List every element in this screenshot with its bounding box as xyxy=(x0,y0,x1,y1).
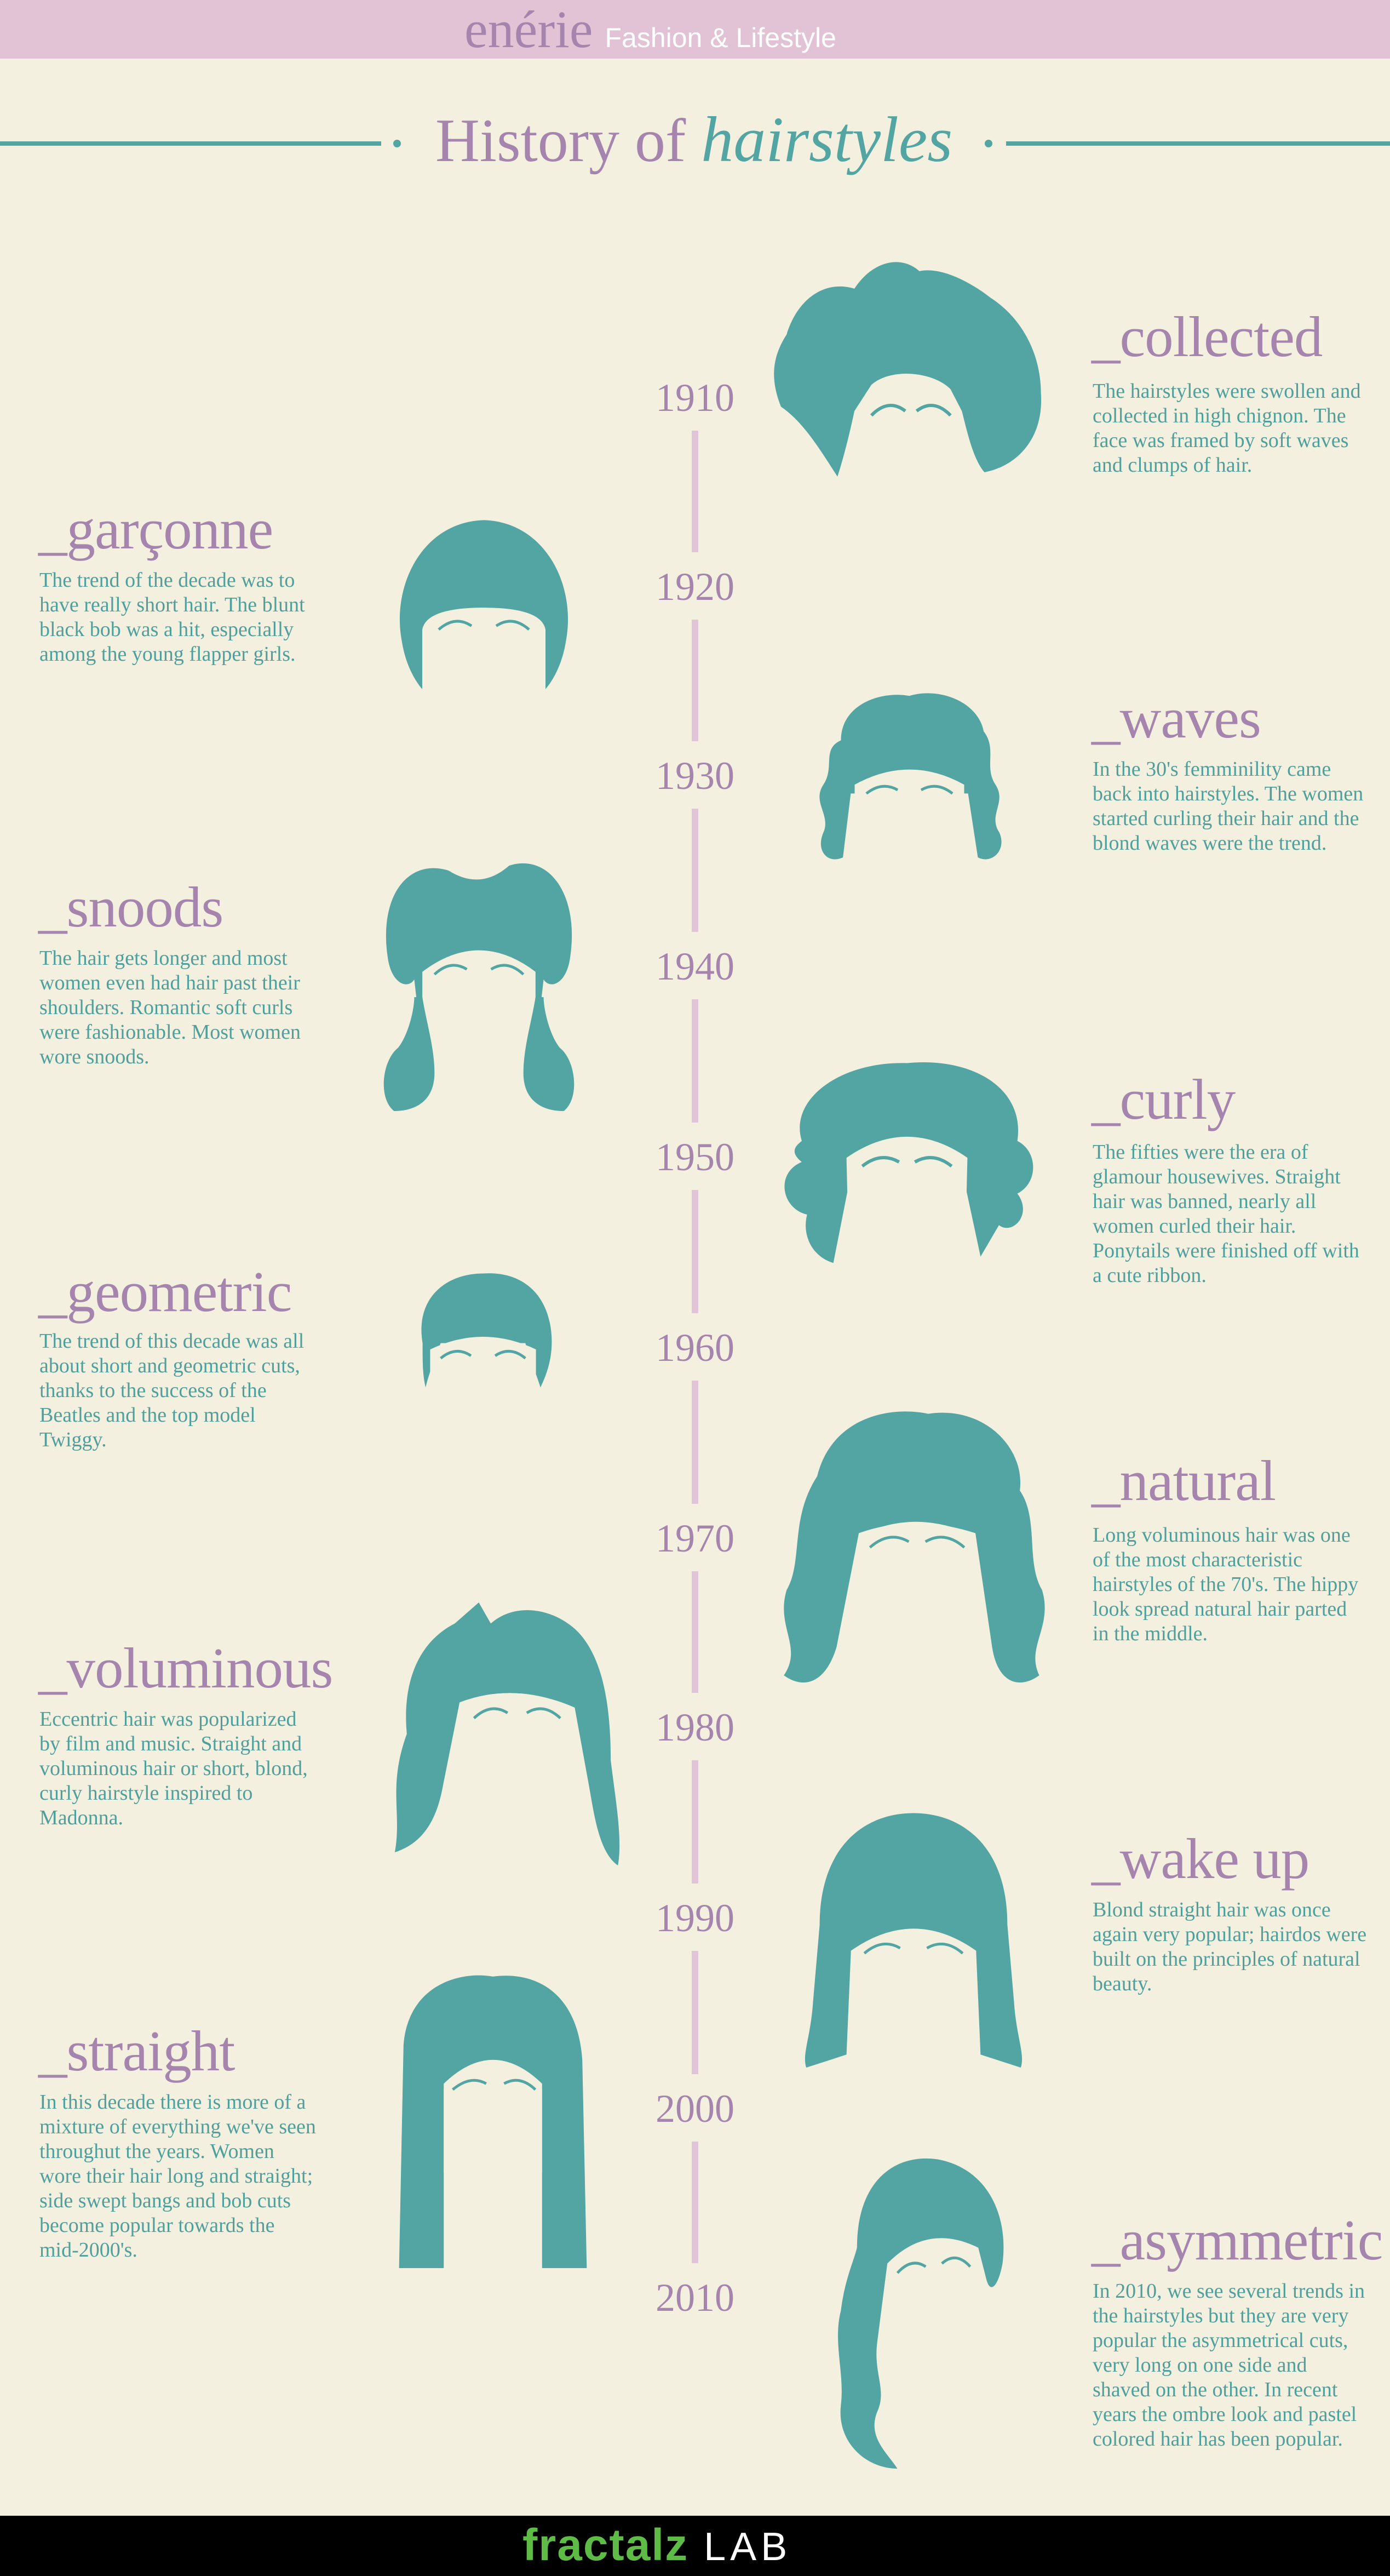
text: asymmetric: very long on one side and xyxy=(1093,2354,1307,2377)
text: wake up: built on the principles of natural xyxy=(1093,1948,1360,1971)
text: asymmetric: popular the asymmetrical cuts, xyxy=(1093,2329,1348,2352)
icon: 1930 waves hair xyxy=(819,693,1002,859)
text: voluminous: voluminous hair or short, blond, xyxy=(39,1757,308,1780)
text: curly: The fifties were the era of xyxy=(1093,1141,1308,1164)
text: garconne: The trend of the decade was to xyxy=(39,569,295,592)
icon: 1910 collected hair xyxy=(774,262,1042,477)
text: garconne: among the young flapper girls. xyxy=(39,643,296,666)
text: geometric: The trend of this decade was all xyxy=(39,1330,304,1353)
text: collected: face was framed by soft waves xyxy=(1093,429,1348,452)
title divider xyxy=(0,140,1390,147)
text: straight: throughut the years. Women xyxy=(39,2140,274,2163)
brand logo: enérie Fashion & Lifestyle xyxy=(464,0,836,59)
text: curly: a cute ribbon. xyxy=(1093,1264,1207,1287)
timeline xyxy=(656,376,734,2320)
text: wake up xyxy=(1093,1898,1366,1995)
heading: curly: _curly xyxy=(1092,1067,1235,1131)
text: asymmetric: In 2010, we see several trends in xyxy=(1093,2280,1365,2303)
text: straight: become popular towards the xyxy=(39,2214,274,2237)
text: natural xyxy=(1093,1524,1358,1645)
icon: 1960 geometric hair xyxy=(421,1273,552,1387)
text: collected: The hairstyles were swollen and xyxy=(1093,380,1361,403)
footer logo: fractalz LAB xyxy=(522,2520,791,2570)
icon: 1920 garconne hair xyxy=(400,520,568,689)
text: waves: started curling their hair and the xyxy=(1093,807,1359,830)
timeline: 2000 xyxy=(656,2087,734,2131)
text: garconne: have really short hair. The blunt xyxy=(39,593,305,616)
heading: garconne: _garçonne xyxy=(38,497,273,561)
text: straight: side swept bangs and bob cuts xyxy=(39,2189,291,2212)
text: collected xyxy=(1093,380,1361,477)
text: snoods: were fashionable. Most women xyxy=(39,1021,301,1044)
title: History of hairstyles xyxy=(435,104,952,175)
heading: geometric: _geometric xyxy=(38,1260,291,1324)
heading: wake up: _wake up xyxy=(1092,1827,1309,1891)
text: straight: mid-2000's. xyxy=(39,2239,137,2262)
icon: 2010 asymmetric hair xyxy=(838,2159,1003,2469)
icon: 1980 voluminous hair xyxy=(394,1602,620,1865)
text: voluminous: by film and music. Straight and xyxy=(39,1732,302,1755)
icon: 1990 wake up hair xyxy=(805,1813,1022,2068)
text: waves xyxy=(1093,758,1363,855)
text: geometric: thanks to the success of the xyxy=(39,1379,267,1402)
timeline: 1940 xyxy=(656,944,734,988)
text: wake up: beauty. xyxy=(1093,1972,1152,1995)
text: geometric xyxy=(39,1330,304,1451)
text: curly: women curled their hair. xyxy=(1093,1215,1296,1238)
text: asymmetric: shaved on the other. In recent xyxy=(1093,2378,1337,2401)
footer band xyxy=(0,2516,1390,2576)
text: snoods: The hair gets longer and most xyxy=(39,947,288,970)
text: straight xyxy=(39,2091,316,2262)
timeline: 1920 xyxy=(656,565,734,609)
timeline: 1950 xyxy=(656,1135,734,1179)
text: curly xyxy=(1093,1141,1359,1287)
timeline: 1930 xyxy=(656,754,734,798)
text: natural: hairstyles of the 70's. The hippy xyxy=(1093,1573,1358,1596)
timeline: 1910 xyxy=(656,376,734,420)
text: asymmetric: the hairstyles but they are very xyxy=(1093,2304,1348,2327)
text: straight: mixture of everything we've seen xyxy=(39,2115,316,2138)
text: snoods: women even had hair past their xyxy=(39,971,300,994)
text: voluminous: Madonna. xyxy=(39,1806,123,1829)
text: geometric: Twiggy. xyxy=(39,1428,107,1451)
text: straight: In this decade there is more of a xyxy=(39,2091,306,2114)
timeline: 1960 xyxy=(656,1326,734,1370)
text: natural: of the most characteristic xyxy=(1093,1548,1302,1571)
text: snoods: wore snoods. xyxy=(39,1045,150,1068)
heading: voluminous: _voluminous xyxy=(38,1636,332,1700)
timeline: 1970 xyxy=(656,1516,734,1560)
text: garconne xyxy=(39,569,305,666)
text: geometric: Beatles and the top model xyxy=(39,1404,256,1427)
heading: collected: _collected xyxy=(1092,305,1322,369)
icon: 1970 natural hair xyxy=(784,1411,1045,1683)
text: asymmetric: years the ombre look and pastel xyxy=(1093,2403,1357,2426)
icon: 1940 snoods hair xyxy=(383,863,574,1111)
header band xyxy=(0,0,1390,59)
heading: snoods: _snoods xyxy=(38,875,223,939)
text: straight: wore their hair long and straight; xyxy=(39,2165,313,2188)
text: voluminous: Eccentric hair was popularized xyxy=(39,1708,297,1731)
timeline: 1980 xyxy=(656,1705,734,1749)
timeline: 2010 xyxy=(656,2276,734,2320)
text: curly: Ponytails were finished off with xyxy=(1093,1239,1359,1262)
text: curly: hair was banned, nearly all xyxy=(1093,1190,1316,1213)
text: natural: in the middle. xyxy=(1093,1622,1208,1645)
text: voluminous: curly hairstyle inspired to xyxy=(39,1782,252,1805)
text: voluminous xyxy=(39,1708,308,1829)
text: asymmetric xyxy=(1093,2280,1365,2451)
text: natural: look spread natural hair parted xyxy=(1093,1598,1347,1621)
text: curly: glamour housewives. Straight xyxy=(1093,1165,1341,1188)
text: wake up: again very popular; hairdos were xyxy=(1093,1923,1366,1946)
heading: straight: _straight xyxy=(38,2019,234,2083)
text: garconne: black bob was a hit, especially xyxy=(39,618,294,641)
heading: natural: _natural xyxy=(1092,1449,1276,1513)
text: asymmetric: colored hair has been popular. xyxy=(1093,2428,1343,2451)
text: snoods: shoulders. Romantic soft curls xyxy=(39,996,292,1019)
text: wake up: Blond straight hair was once xyxy=(1093,1898,1331,1921)
timeline: 1990 xyxy=(656,1896,734,1940)
text: collected: and clumps of hair. xyxy=(1093,454,1252,477)
text: natural: Long voluminous hair was one xyxy=(1093,1524,1351,1547)
text: waves: blond waves were the trend. xyxy=(1093,832,1326,855)
icon: 1950 curly hair xyxy=(784,1062,1033,1263)
text: snoods xyxy=(39,947,301,1068)
text: waves: back into hairstyles. The women xyxy=(1093,782,1363,805)
text: collected: collected in high chignon. The xyxy=(1093,404,1346,427)
text: waves: In the 30's femminility came xyxy=(1093,758,1331,781)
heading: waves: _waves xyxy=(1092,686,1261,750)
icon: 2000 straight hair xyxy=(399,1976,587,2268)
heading: asymmetric: _asymmetric xyxy=(1092,2208,1382,2272)
text: geometric: about short and geometric cuts, xyxy=(39,1354,300,1377)
